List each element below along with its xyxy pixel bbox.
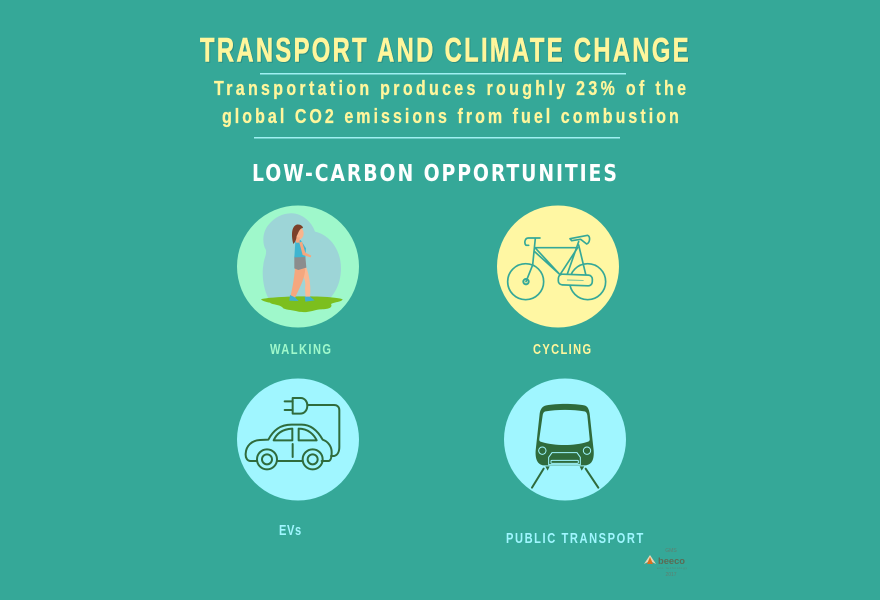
logo: beeco — [644, 548, 688, 578]
icon: bee — [644, 555, 656, 564]
icon: cycling circle — [497, 206, 619, 328]
label: EVs: EVs — [279, 521, 301, 538]
logo: beeco: beeco — [658, 556, 686, 566]
logo: beeco: 2017 — [665, 572, 677, 578]
panel: cycling — [497, 206, 619, 357]
subtitle: global CO2 emissions from fuel combustion — [222, 105, 679, 127]
panel: EVs — [237, 378, 359, 538]
icon: train — [532, 404, 598, 488]
subtitle — [214, 77, 686, 127]
panel: walking — [237, 206, 359, 357]
icon: transport circle — [504, 378, 626, 500]
logo: beeco: eco technology — [657, 566, 688, 570]
label: cycling: CYCLING — [533, 340, 591, 357]
title: TRANSPORT AND CLIMATE CHANGE — [201, 32, 690, 71]
heading: low-carbon opportunities: LOW-CARBON OPPORTUNITIES — [252, 159, 617, 186]
panel: public transport — [504, 378, 643, 546]
label: public transport: PUBLIC TRANSPORT — [506, 529, 643, 546]
icon: walking woman — [261, 213, 343, 312]
icon: EV circle — [237, 378, 359, 500]
icon: walking circle — [237, 206, 359, 328]
icon: bicycle — [508, 235, 606, 300]
logo: beeco: GMS — [665, 548, 677, 554]
title: TRANSPORT AND CLIMATE CHANGE — [200, 31, 689, 70]
label: walking: WALKING — [270, 340, 331, 357]
icon: electric car — [246, 398, 339, 469]
subtitle: Transportation produces roughly 23% of the — [214, 77, 686, 99]
